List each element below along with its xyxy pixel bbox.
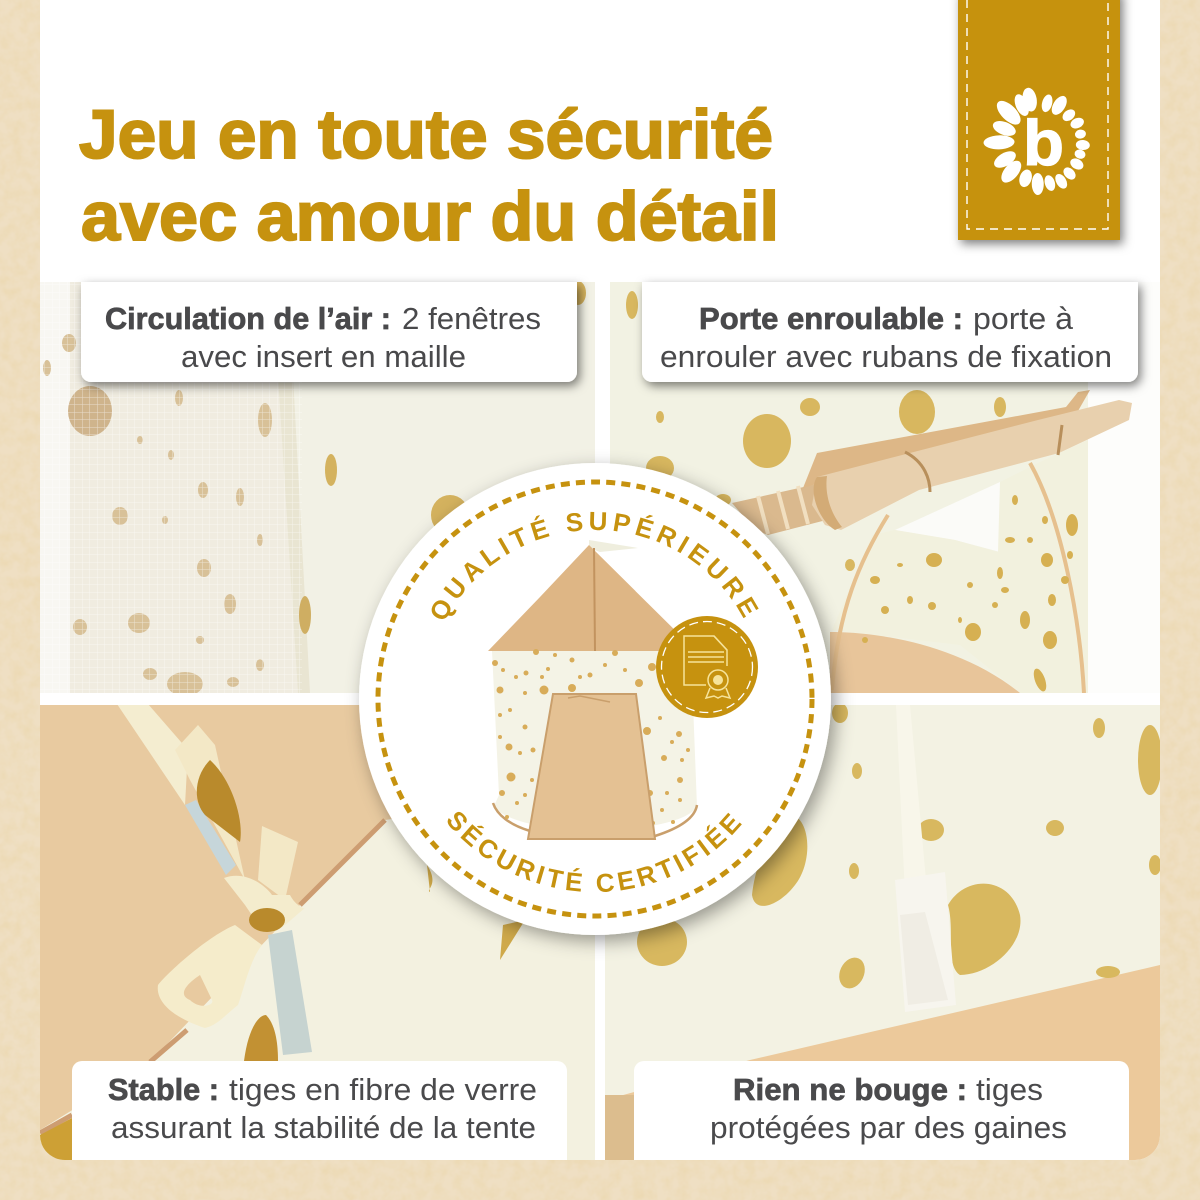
card: stable: assurant la stabilité de la tente <box>111 1110 536 1145</box>
photo: fibreglass pole knot <box>40 704 595 1160</box>
brand tag <box>958 0 1120 240</box>
tent illustration <box>488 540 697 839</box>
card: air circulation: avec insert en maille <box>181 339 466 374</box>
card: stable <box>72 1061 567 1160</box>
certificate badge <box>656 616 758 718</box>
icon: sunflower logo: b <box>1023 107 1064 179</box>
card: nothing moves: tiges <box>976 1072 1043 1107</box>
title <box>79 96 779 255</box>
card: roll-up door: enrouler avec rubans de fixation <box>660 339 1112 374</box>
card: air circulation: 2 fenêtres <box>402 301 541 336</box>
photo: roll-up door <box>610 282 1160 693</box>
card: stable: tiges en fibre de verre <box>229 1072 537 1107</box>
card: nothing moves: protégées par des gaines <box>710 1110 1067 1145</box>
title: Jeu en toute sécurité <box>79 96 773 173</box>
card: air circulation <box>81 282 577 382</box>
card: nothing moves: Rien ne bouge : <box>733 1072 967 1107</box>
central quality seal <box>352 458 848 952</box>
card: stable: Stable : <box>108 1072 219 1107</box>
photo: window mesh <box>40 281 595 696</box>
card: roll-up door: porte à <box>973 301 1074 336</box>
photo: protected poles <box>605 703 1162 1160</box>
icon: certificate <box>684 636 730 698</box>
card: roll-up door: Porte enroulable : <box>699 301 963 336</box>
card: air circulation: Circulation de l’air : <box>105 301 391 336</box>
card: nothing moves <box>634 1061 1129 1160</box>
title: avec amour du détail <box>81 178 779 255</box>
curved text: bottom: SÉCURITÉ CERTIFIÉE <box>448 812 742 892</box>
icon: sunflower logo <box>983 87 1090 195</box>
curved text: top: QUALITÉ SUPÉRIEURE <box>432 512 759 619</box>
card: roll-up door <box>642 282 1138 382</box>
